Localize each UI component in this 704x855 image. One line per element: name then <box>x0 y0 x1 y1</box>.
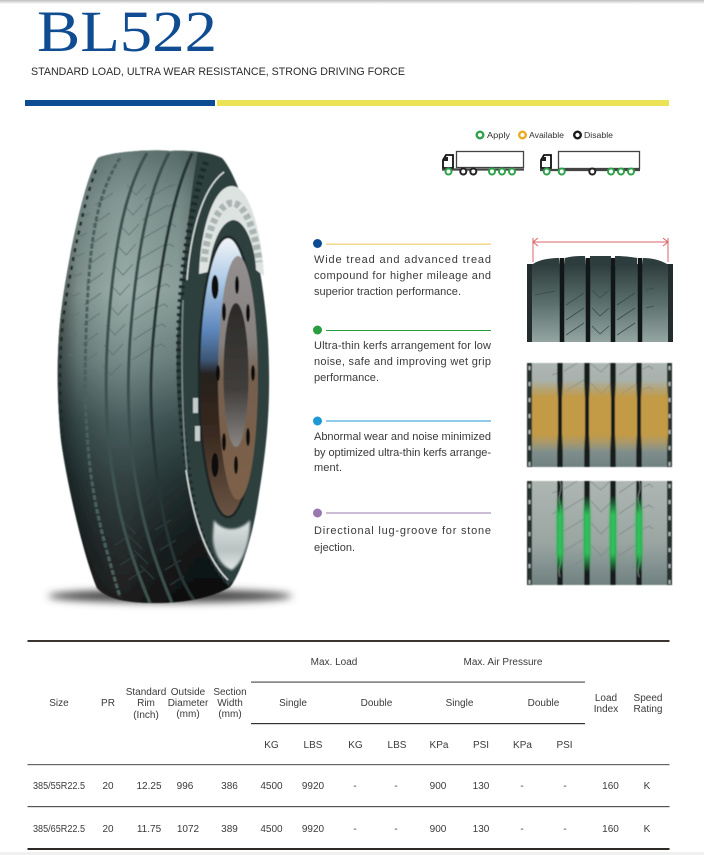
sidewall shoulder lugs <box>179 162 232 586</box>
table header: Load <box>595 693 617 704</box>
hub <box>218 256 258 500</box>
table rules <box>28 640 670 850</box>
feature 3: ment. <box>314 462 342 474</box>
table header: Single <box>279 698 307 709</box>
truck icon: tractor with full trailer <box>540 152 640 174</box>
table header: Max. Air Pressure <box>464 657 543 668</box>
table header: PSI <box>556 740 573 751</box>
table header <box>49 657 662 751</box>
table row 2 <box>33 824 651 835</box>
table row 1: 20 <box>102 781 114 792</box>
feature 1: superior traction performance. <box>314 286 461 298</box>
table row 2: 130 <box>473 824 490 835</box>
page top edge <box>0 0 704 4</box>
table row 2: - <box>394 824 398 835</box>
truck icon: tractor with semi-trailer <box>442 152 524 174</box>
table row 2: 389 <box>221 824 238 835</box>
table row 2: 900 <box>430 824 447 835</box>
table row 1 <box>33 781 651 792</box>
legend: apply: Apply <box>487 131 510 140</box>
feature 2: performance. <box>314 372 379 384</box>
table header: Max. Load <box>311 657 357 668</box>
spec table <box>28 640 670 850</box>
table row 1: - <box>394 781 398 792</box>
table header: Rating <box>634 704 662 715</box>
tread panel: groove highlight <box>527 477 672 585</box>
table row 1: 900 <box>430 781 447 792</box>
table header: KPa <box>513 740 532 751</box>
sidewall lettering band <box>199 186 264 276</box>
sidewall highlight patch <box>213 520 250 570</box>
bolt holes <box>212 275 255 477</box>
table header: Width <box>217 698 243 709</box>
feature 3: by optimized ultra-thin kerfs arrange- <box>314 447 491 459</box>
tread chevrons <box>68 184 180 375</box>
feature 4: ejection. <box>314 542 355 554</box>
table header: KPa <box>430 740 449 751</box>
width arrow <box>533 238 668 262</box>
table row 1: 160 <box>602 781 619 792</box>
table row 2: 385/65R22.5 <box>33 824 85 835</box>
table header: Single <box>446 698 474 709</box>
tread grooves <box>85 158 120 597</box>
hub centre <box>224 303 248 447</box>
sidewall labels <box>193 398 200 441</box>
table row 2: 9920 <box>302 824 325 835</box>
table header: KG <box>264 740 279 751</box>
tire illustration <box>40 140 292 620</box>
table header: Section <box>213 687 247 698</box>
table row 2: K <box>644 824 651 835</box>
feature 1 <box>313 239 491 298</box>
table row 1: 4500 <box>260 781 283 792</box>
table header: (mm) <box>176 709 200 720</box>
tread panel: wear band <box>527 359 672 467</box>
table header: (mm) <box>218 709 242 720</box>
legend: disable: Disable <box>584 131 614 140</box>
table header: Speed <box>634 693 662 704</box>
table row 1: - <box>563 781 567 792</box>
feature 2: Ultra-thin kerfs arrangement for low <box>314 340 491 352</box>
table header: Outside <box>171 687 206 698</box>
table row 1: 385/55R22.5 <box>33 781 85 792</box>
tread <box>58 150 230 604</box>
table header: Double <box>528 698 560 709</box>
table row 2: 160 <box>602 824 619 835</box>
table header: Diameter <box>168 698 209 709</box>
table header: Index <box>594 704 618 715</box>
table row 2: 4500 <box>260 824 283 835</box>
header colour bar <box>25 100 669 106</box>
table row 1: K <box>644 781 651 792</box>
table header: PR <box>101 698 115 709</box>
table row 1: 12.25 <box>136 781 162 792</box>
table row 2: 11.75 <box>137 824 162 835</box>
table row 1: 130 <box>473 781 490 792</box>
table row 1: - <box>353 781 357 792</box>
subtitle: STANDARD LOAD, ULTRA WEAR RESISTANCE, STRONG DRIVING FORCE <box>31 66 405 78</box>
table row 2: 20 <box>102 824 114 835</box>
feature 3 <box>313 416 491 474</box>
feature 2: noise, safe and improving wet grip <box>314 356 491 368</box>
table header: (Inch) <box>133 710 159 721</box>
legend <box>477 131 614 140</box>
table header: LBS <box>304 740 323 751</box>
table header: Rim <box>137 698 155 709</box>
table row 1: 9920 <box>302 781 325 792</box>
left shoulder lugs <box>60 170 96 465</box>
table row 1: - <box>520 781 524 792</box>
tire sidewall <box>58 150 269 603</box>
feature 4 <box>313 508 491 554</box>
table header: Standard <box>126 687 166 698</box>
feature 3: Abnormal wear and noise minimized <box>314 431 491 443</box>
table row 1: 996 <box>177 781 194 792</box>
ground shadow <box>48 590 292 602</box>
table header: LBS <box>388 740 407 751</box>
table row 2: 1072 <box>177 824 200 835</box>
table row 2: - <box>353 824 357 835</box>
tread panel: width dimension <box>527 238 673 342</box>
table header: Size <box>49 698 69 709</box>
page bottom edge <box>0 852 704 855</box>
feature 1: Wide tread and advanced tread <box>314 254 491 266</box>
legend: available: Available <box>529 131 565 140</box>
feature 1: compound for higher mileage and <box>314 270 491 282</box>
title: BL522 <box>37 0 217 64</box>
feature 2 <box>313 326 491 384</box>
table row 2: - <box>520 824 524 835</box>
feature 4: Directional lug-groove for stone <box>314 525 491 537</box>
table header: PSI <box>473 740 489 751</box>
table row 2: - <box>563 824 567 835</box>
wheel rim <box>199 237 257 517</box>
table row 1: 386 <box>221 781 238 792</box>
table header: KG <box>348 740 363 751</box>
table header: Double <box>361 698 393 709</box>
